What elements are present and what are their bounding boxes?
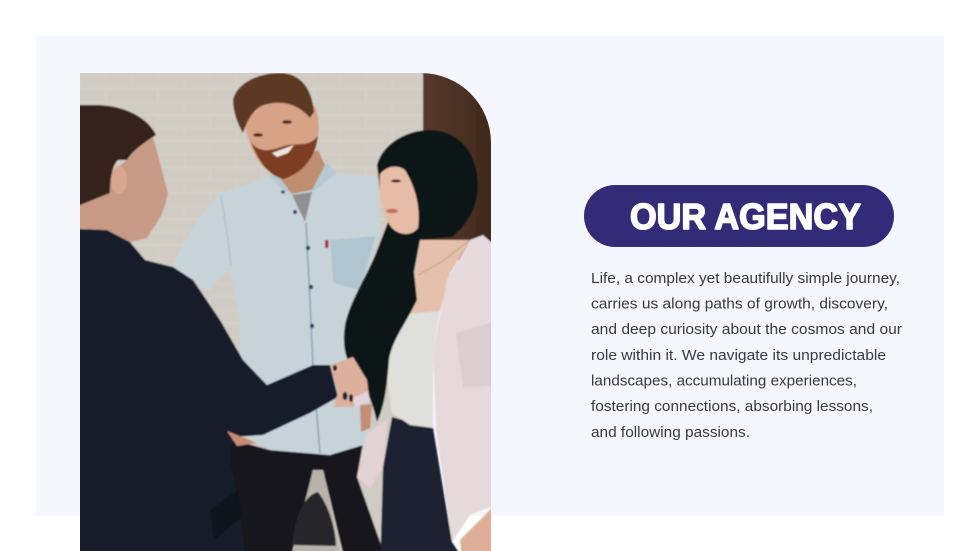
man: sleeve seam shadow	[221, 195, 231, 265]
right woman: hand on hip	[459, 508, 491, 551]
man: trousers	[225, 438, 390, 551]
right woman: shirt pocket	[456, 323, 491, 388]
right woman: necklace	[418, 240, 470, 275]
pill background	[584, 185, 894, 247]
floor behind legs	[290, 470, 340, 551]
curtain	[422, 73, 491, 260]
man: face	[244, 102, 320, 170]
body paragraph	[591, 270, 902, 441]
right woman: chest skin	[403, 240, 470, 314]
right woman: pink shirt	[432, 234, 491, 543]
man: neck	[280, 150, 326, 195]
man: shirt buttons	[281, 190, 314, 328]
body paragraph: Life, a complex yet beautifully simple journey,	[591, 270, 900, 287]
man: shirt	[173, 163, 380, 455]
man: shirt placket	[306, 223, 320, 453]
man: other hand	[360, 404, 372, 432]
left woman: skin	[80, 136, 168, 243]
heading pill	[584, 185, 894, 247]
man: eyes	[253, 120, 292, 137]
left woman: hair	[80, 104, 156, 206]
body paragraph: landscapes, accumulating experiences,	[591, 372, 857, 390]
body paragraph: and following passions.	[591, 424, 750, 441]
man: smile	[272, 145, 294, 157]
heading: our agency: OUR AGENCY	[630, 196, 861, 237]
right woman: eye	[391, 180, 401, 182]
right woman: lips	[386, 209, 398, 213]
left woman: jacket	[60, 228, 338, 551]
body paragraph: carries us along paths of growth, discovery,	[591, 296, 888, 312]
man: t-shirt at neck	[292, 192, 312, 222]
painted nails	[333, 365, 353, 402]
right woman: white top	[387, 310, 440, 428]
body paragraph: fostering connections, absorbing lessons,	[591, 398, 873, 415]
right woman: face	[380, 167, 419, 234]
man: chest pocket	[330, 236, 376, 290]
left woman: ear	[111, 166, 127, 194]
man: hair	[233, 73, 314, 133]
right woman: jeans	[379, 416, 459, 551]
man: collar	[270, 174, 290, 194]
right woman: hair	[344, 130, 478, 422]
left woman: pocket flap	[210, 490, 242, 540]
floor bag	[292, 492, 336, 546]
handshake hands	[330, 357, 369, 407]
right woman: shirt lower left panel	[357, 420, 387, 488]
brick wall	[60, 60, 430, 551]
man: red pocket tag	[325, 240, 328, 248]
pink cuff	[353, 391, 370, 408]
body paragraph: role within it. We navigate its unpredictable	[591, 347, 886, 364]
body paragraph: and deep curiosity about the cosmos and our	[591, 321, 902, 338]
man: hand at hip	[227, 431, 257, 446]
photo: three people shaking hands	[60, 60, 503, 551]
man: beard	[251, 136, 318, 179]
